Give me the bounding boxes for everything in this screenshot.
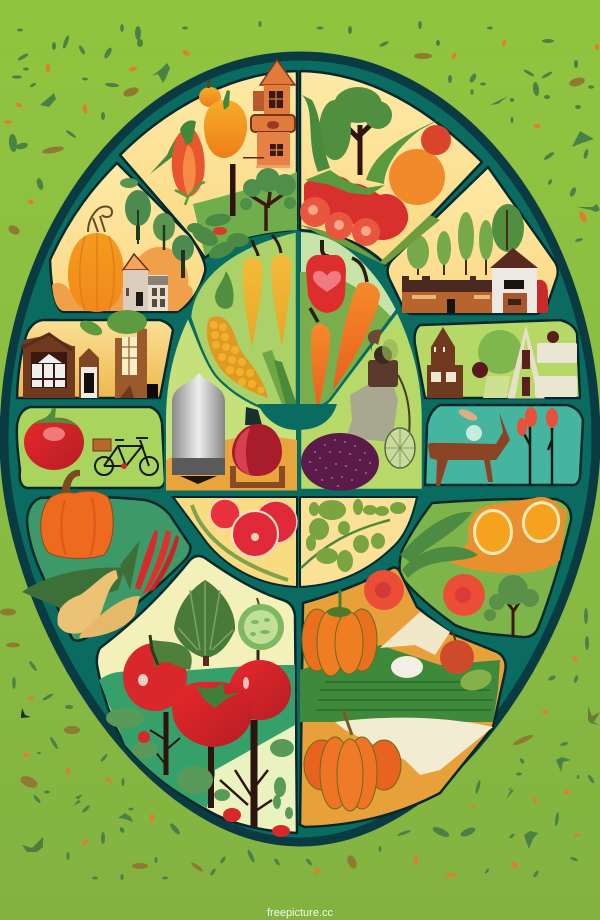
panel: centre upper vegetables [190,231,397,420]
panel: orange slices [400,497,571,637]
watermark: freepicture.cc [267,907,334,919]
icon: round fruits [300,197,380,246]
icon: flower and stairs [472,362,510,398]
icon: cyclist [346,330,415,468]
panel: tomato and bicycle [17,407,165,488]
orange blob [450,498,567,573]
icon: green stalks [262,350,297,420]
icon: row of trees [407,204,524,275]
icon: strawberries [304,170,408,240]
icon: yellow pepper [204,90,247,158]
icon: white bowl [391,656,423,678]
orange cloud [52,247,193,311]
icon: lettuce [458,666,494,694]
icon: tree and lettuce [302,87,442,184]
icon: small apples [138,731,290,837]
icon: citrus slices [210,499,297,557]
icon: orange [389,149,445,205]
icon: carrots [310,258,380,413]
icon: silver object [172,373,225,484]
icon: small pumpkin [199,80,221,107]
icon: deer [428,412,510,486]
icon: green lime [238,598,284,650]
icon: garlic [57,570,140,638]
icon: orange slices [468,497,565,559]
icon: pumpkin top [302,590,377,676]
icon: tower [115,327,158,398]
divider [165,490,423,494]
icon: white shreds [335,718,493,775]
icon: leaves [400,512,478,578]
icon: orange tower house [243,60,295,168]
panel: centre lower left silver pot [165,317,297,492]
icon: chillies [135,530,179,595]
icon: foliage with berry [187,212,249,262]
icon: church [427,327,463,398]
icon: brick building [402,276,492,313]
icon: herb sprig [301,499,406,572]
icon: bicycle [93,438,158,475]
icon: big dark leaf [22,567,125,608]
icon: small house [79,348,99,398]
icon: bush [478,330,522,374]
icon: big pumpkin [68,206,124,312]
panel: pumpkin, chilli and garlic [22,470,190,641]
panel: apples and trees [97,556,297,837]
icon: white panels [535,343,577,397]
icon: apple centre [172,680,252,747]
icon: brown house [21,334,75,398]
icon: yellow carrots [243,235,291,347]
icon: bottom pumpkin [304,710,401,811]
icon: orange pumpkin [41,470,113,558]
icon: white house [490,248,548,313]
panel: top left vegetables and tower [120,60,297,262]
icon: tree [240,168,296,231]
icon: apple left [123,635,192,711]
icon: leaf and corn [207,271,268,398]
panel: centre lower right cyclist and grapes [258,310,423,491]
icon: A-frame house [508,327,544,398]
icon: red apple [421,125,451,155]
icon: red bud trees [517,407,558,485]
panel: teal deer [425,405,583,486]
icon: leaves over tower [78,310,147,339]
icon: teal bowl [258,404,337,430]
icon: herb stem [192,505,288,580]
icon: trees [120,178,194,278]
icon: red pot [232,407,282,485]
icon: artichoke leaf [174,580,235,666]
icon: tomato [24,408,84,470]
icon: moon and peach [457,407,482,441]
panel: pumpkins and greens [300,568,506,827]
icon: tomato slice [364,570,404,610]
post [230,164,236,216]
icon: red vegetable with leaves [150,120,205,205]
icon: tree trunks [150,712,272,827]
panel: citrus slices [173,497,297,587]
icon: foliage [106,708,294,819]
panel: left houses [17,310,173,398]
icon: house [123,254,168,311]
icon: tree [484,575,539,637]
icon: apple right [229,650,291,720]
panel: left pumpkin and village [50,163,205,312]
icon: grapes [301,433,379,491]
panel: farm buildings right [388,167,558,314]
panel: green herbs [300,497,417,587]
icon: red pepper [306,240,346,313]
panel: top right fruit and trees [300,71,482,265]
icon: apple [440,630,474,674]
icon: green band [300,645,500,722]
icon: white pieces [380,612,450,655]
panel: house row [415,320,580,398]
icon: tomato slice [443,574,485,616]
